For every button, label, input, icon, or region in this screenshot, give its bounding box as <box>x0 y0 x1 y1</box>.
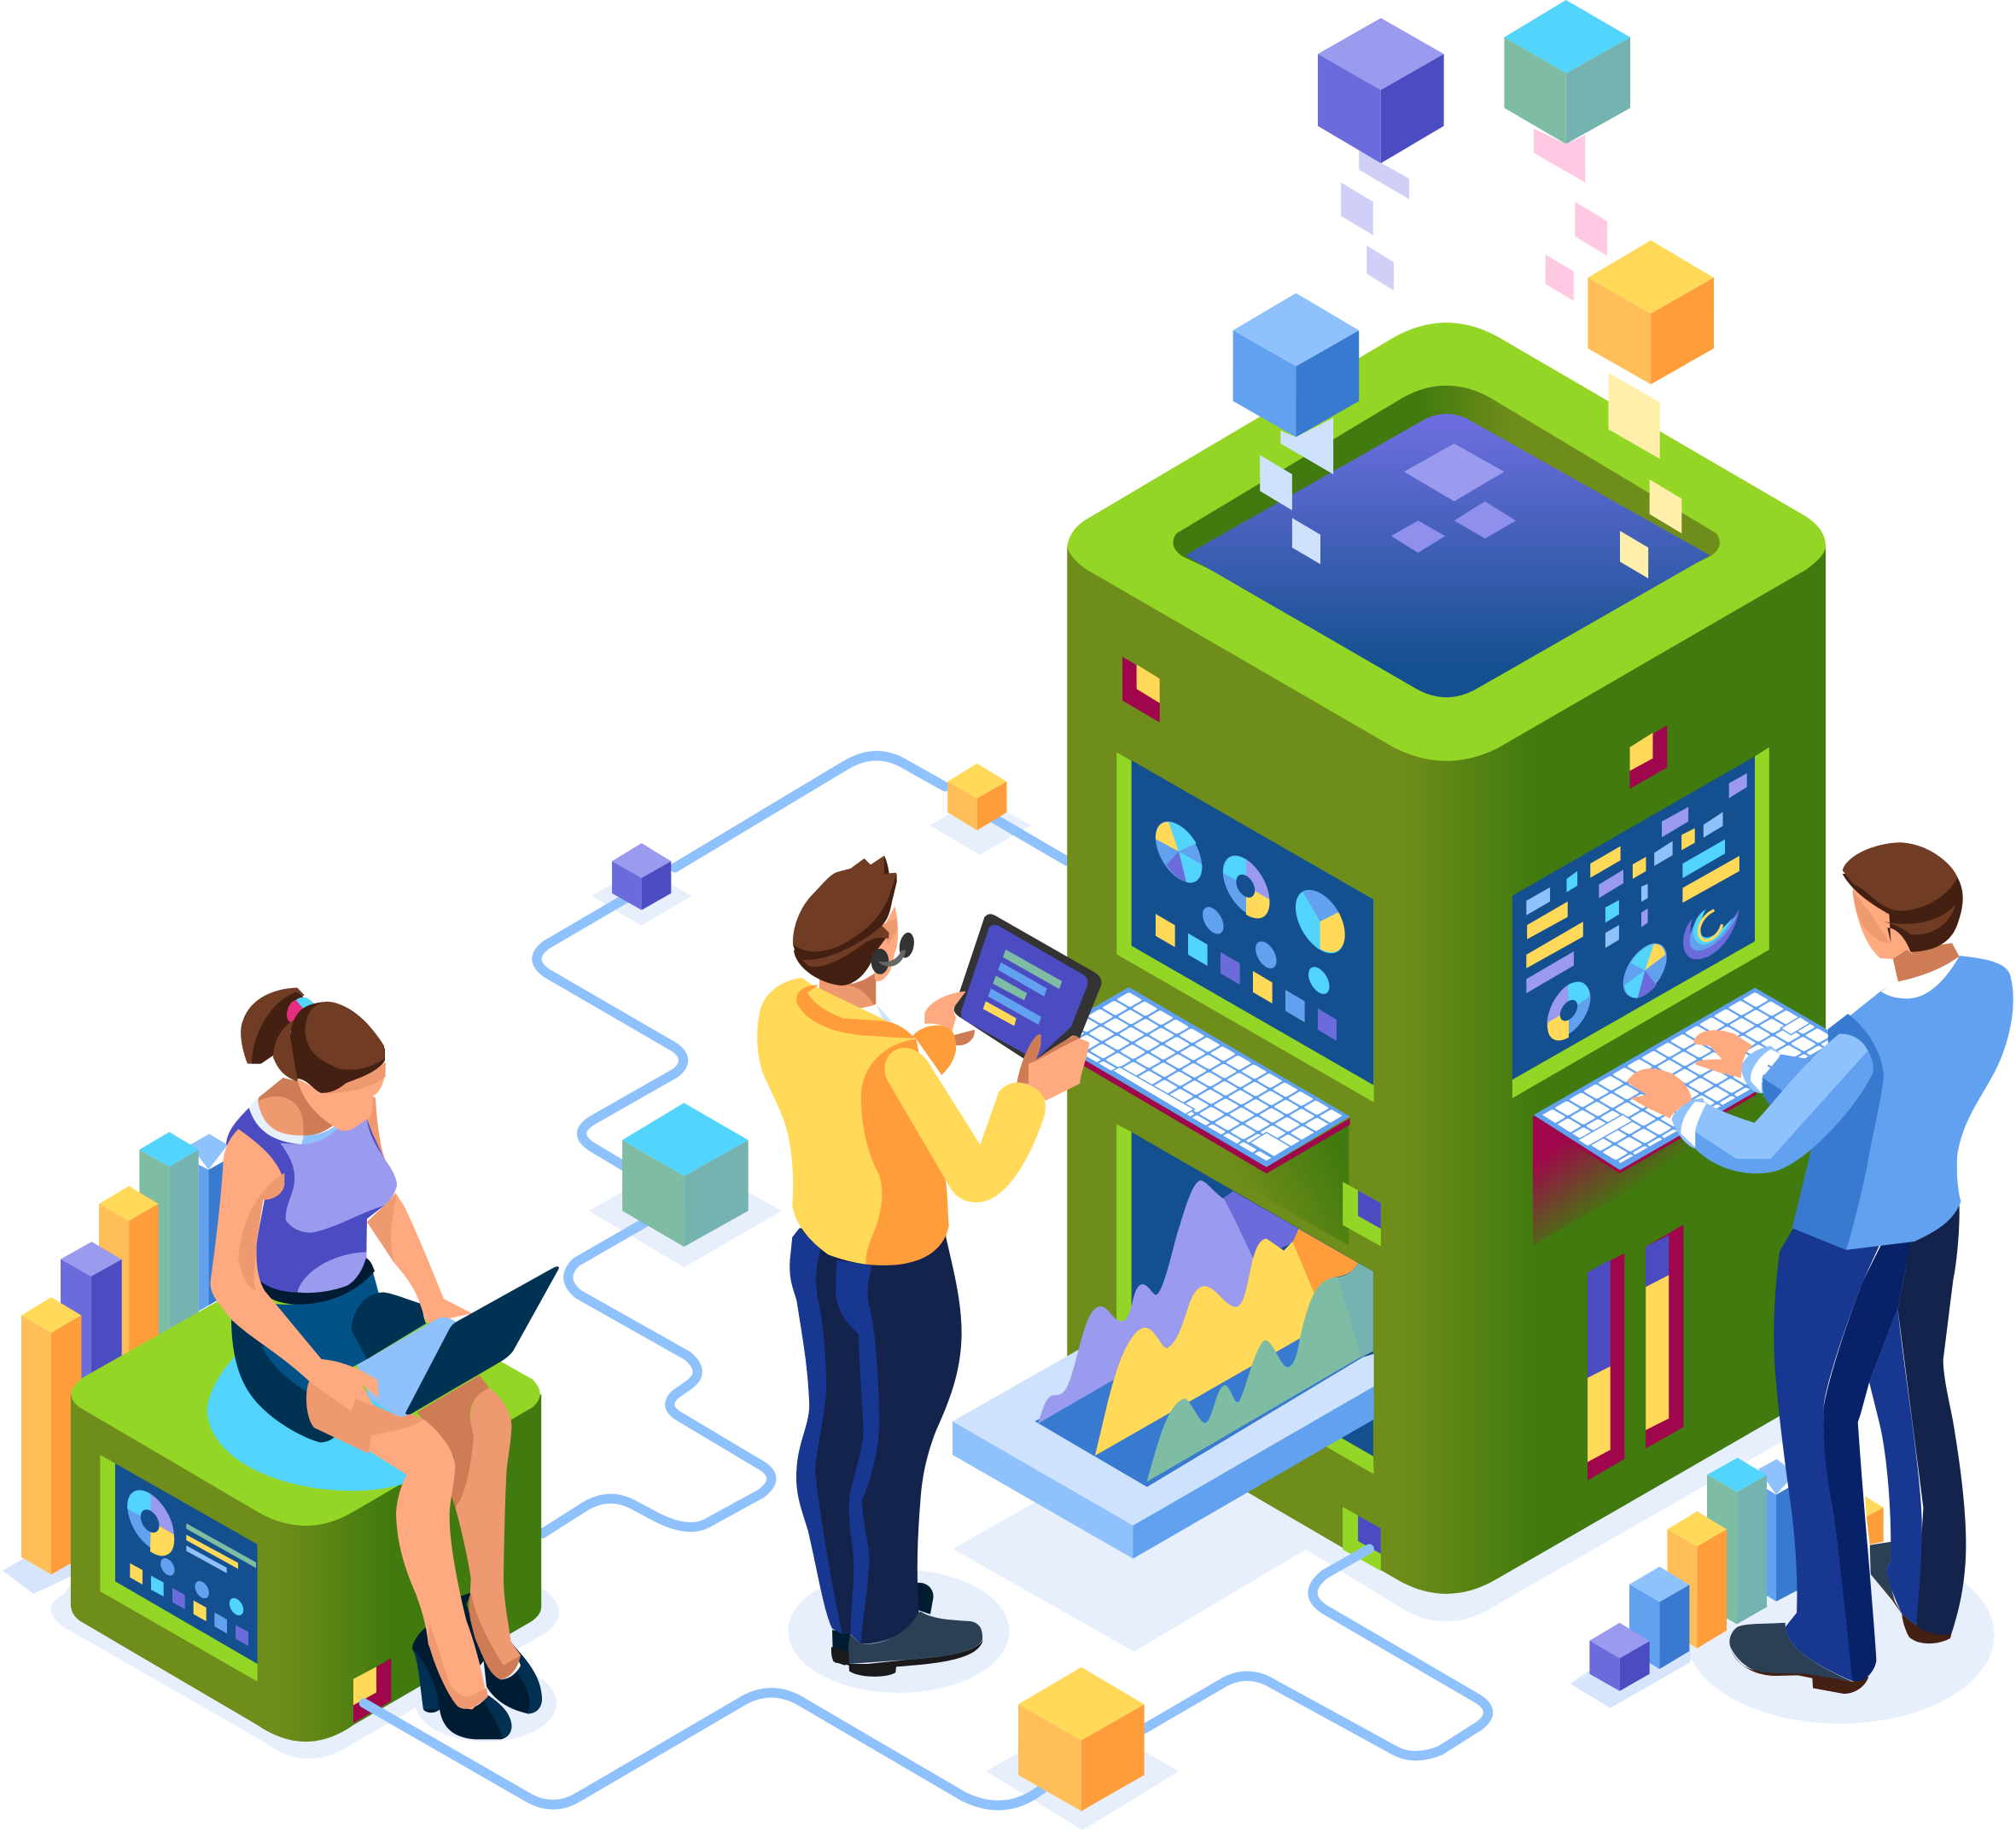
keyboard: right <box>1533 988 1845 1245</box>
person: man with tablet <box>757 856 1102 1677</box>
cushion <box>207 1337 459 1491</box>
node cube: small purple <box>612 843 671 910</box>
floor shadow: right bars <box>1570 1645 1691 1708</box>
laptop <box>357 1266 559 1416</box>
shelf shadow under keyboard <box>1125 1109 1349 1246</box>
bars and tiles <box>1526 773 1747 993</box>
headset <box>871 931 916 974</box>
near arm <box>210 1129 378 1411</box>
storage slot 1 <box>1588 1253 1624 1480</box>
radial gauge <box>1683 910 1739 959</box>
top recess <box>1173 386 1720 681</box>
floating cube: yellow <box>1588 241 1714 579</box>
corner marker left <box>1122 657 1160 723</box>
person: man typing <box>1627 842 2013 1694</box>
head <box>793 856 898 986</box>
skirt <box>231 1258 427 1442</box>
trousers and shoes <box>790 1228 983 1677</box>
corner marker right <box>1630 725 1667 788</box>
top screen <box>1186 414 1710 697</box>
storage slot 2 <box>1646 1224 1683 1449</box>
node cube: teal <box>622 1102 749 1247</box>
seat screen <box>100 1455 258 1682</box>
data tray with area chart <box>953 1180 1374 1559</box>
lower left graph screen frame <box>953 1109 1381 1571</box>
tower body <box>1067 546 1826 1594</box>
donut chart <box>1214 847 1279 924</box>
left dashboard screen <box>1116 753 1374 1102</box>
thigh <box>306 1371 424 1453</box>
right bar chart <box>1570 1457 1884 1708</box>
seat block <box>71 1266 541 1742</box>
floor shadow: left bars <box>3 1543 72 1594</box>
pie chart 2 <box>1285 881 1355 962</box>
floor shadows <box>50 797 1994 1830</box>
status tile upper <box>1343 1182 1381 1247</box>
seat body <box>71 1394 541 1742</box>
top screen diamonds <box>1391 444 1516 553</box>
floating cube: purple <box>1318 18 1444 290</box>
status tile lower <box>1343 1507 1381 1571</box>
node cube: small orange <box>947 764 1006 830</box>
trousers and shoes <box>1729 1195 1966 1694</box>
torso, head and arms <box>210 987 559 1416</box>
floating cube: blue <box>1233 293 1359 564</box>
seat top <box>72 1266 540 1526</box>
keyboard: left <box>1044 987 1350 1173</box>
cables behind objects <box>537 756 1489 1756</box>
server tower <box>953 323 1826 1594</box>
floating cube: teal <box>1504 0 1630 300</box>
right dashboard screen <box>1512 747 1769 1098</box>
cable under seat <box>364 1693 1048 1806</box>
upper body <box>1627 842 2013 1250</box>
person: woman with laptop <box>210 987 559 1739</box>
seat corner marker <box>353 1658 391 1723</box>
tablet <box>954 914 1102 1086</box>
donut chart <box>1538 977 1599 1044</box>
left bar chart <box>21 1132 228 1574</box>
dots and tiles <box>1156 904 1337 1041</box>
pie chart <box>1614 936 1675 1004</box>
tower top rim <box>1067 323 1826 761</box>
cable into tower <box>1325 1549 1369 1574</box>
legs and shoes <box>369 1375 542 1739</box>
upper body <box>757 856 1102 1265</box>
node cube: yellow <box>1018 1667 1145 1811</box>
pie chart 1 <box>1146 813 1211 890</box>
